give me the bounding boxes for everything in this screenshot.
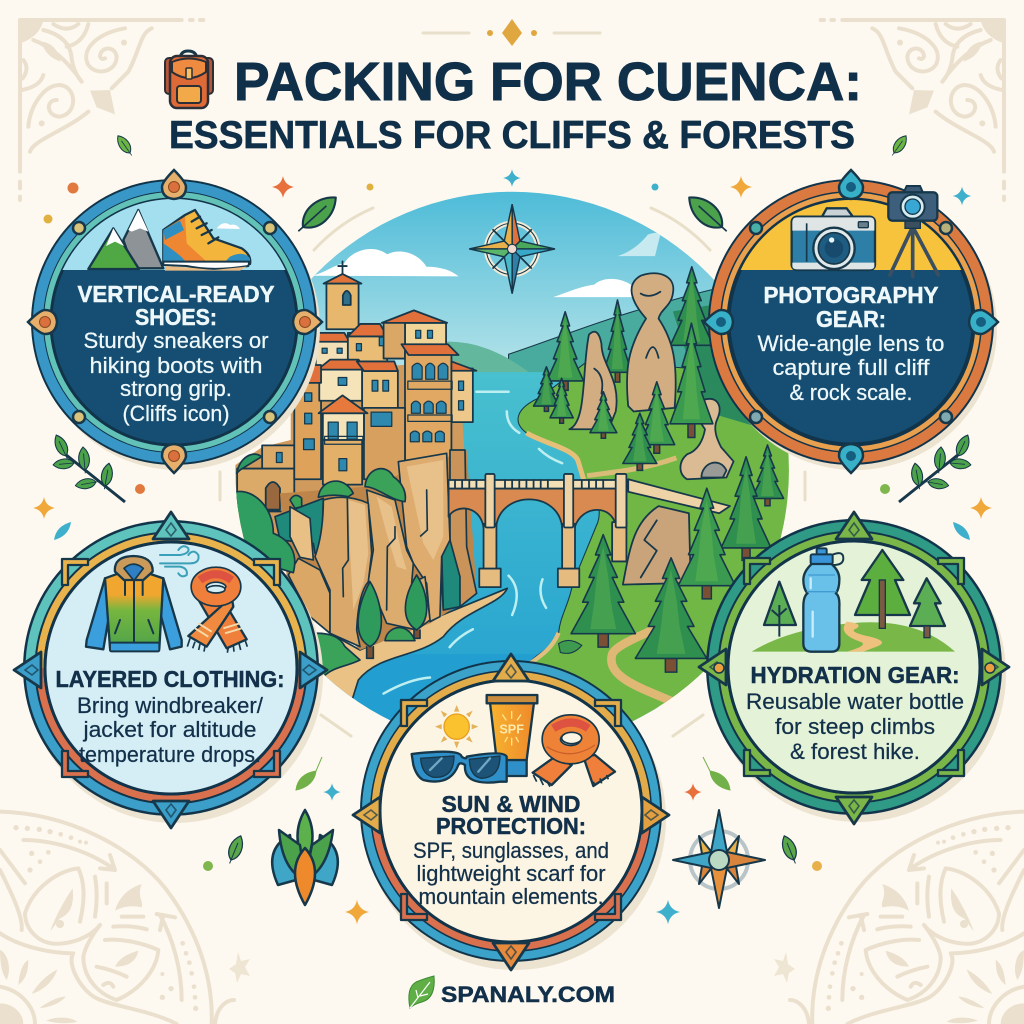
icon: compass star	[673, 810, 765, 908]
front pine trees	[550, 323, 784, 672]
badge text: Bring windbreaker/	[77, 693, 264, 718]
town backing wall	[230, 361, 467, 547]
clouds	[312, 249, 634, 297]
scattered leaves, stars and dots	[33, 133, 992, 924]
badge text: SHOES:	[135, 304, 217, 330]
badge text: Sturdy sneakers or	[84, 328, 268, 353]
badge text: capture full cliff	[772, 355, 930, 380]
badge text: PROTECTION:	[436, 813, 586, 839]
rock formations	[569, 273, 734, 585]
back pine trees	[534, 267, 713, 411]
sky	[311, 192, 714, 366]
icon scene: mountains and boot	[62, 199, 286, 271]
central scene: Cuenca cliffs, river and forest	[235, 192, 789, 722]
badge text: LAYERED CLOTHING:	[56, 666, 284, 692]
badge: photography gear	[704, 170, 998, 473]
footer brand: SPANALY.COM	[441, 982, 615, 1007]
badge text: jacket for altitude	[82, 717, 256, 742]
frame ornaments	[14, 512, 327, 828]
river	[408, 372, 658, 722]
badge text: SPF, sunglasses, and	[413, 838, 609, 863]
top ornament diamond	[423, 19, 600, 46]
badge: vertical-ready shoes	[28, 170, 322, 473]
yellow header band	[740, 200, 962, 270]
frame ornaments	[28, 170, 322, 473]
badge text: lightweight scarf for	[416, 861, 606, 886]
frame ornaments	[353, 654, 669, 970]
badge text: for steep climbs	[775, 714, 935, 739]
badge text	[78, 281, 274, 426]
badge text: (Cliffs icon)	[122, 401, 230, 426]
footer brand	[409, 976, 615, 1008]
frame ornaments	[704, 170, 998, 473]
icon: backpack	[165, 51, 213, 108]
badge: hydration gear	[699, 512, 1009, 824]
icon: jacket, wind and scarf	[86, 546, 247, 653]
icon: cameras and tripod	[792, 186, 938, 277]
leaf branch left	[51, 433, 125, 502]
badge: sun and wind protection	[353, 654, 669, 970]
badge text	[746, 662, 964, 764]
badge text	[758, 282, 944, 405]
building windows	[276, 330, 464, 471]
badge text: & forest hike.	[790, 739, 920, 764]
icon: sun, sunscreen, sunglasses, scarf	[412, 695, 615, 787]
badge text: SUN & WIND	[442, 791, 580, 817]
title	[169, 52, 862, 157]
compass rose in sky	[469, 204, 555, 294]
hills	[508, 289, 712, 372]
frame ornaments	[699, 512, 1009, 824]
badge text: mountain elements.	[418, 884, 604, 909]
badge: layered clothing	[14, 512, 327, 828]
badge text: VERTICAL-READY	[78, 281, 274, 307]
badge text: PHOTOGRAPHY	[764, 282, 938, 308]
forest land	[518, 362, 789, 722]
stone bridge	[449, 474, 730, 587]
title: PACKING FOR CUENCA:	[234, 52, 862, 112]
badge text	[56, 666, 284, 767]
icon: water bottle and trees	[752, 548, 955, 652]
arcs around central scene	[220, 208, 805, 736]
cliffs, bank and vegetation	[230, 450, 507, 707]
badge text: Wide-angle lens to	[758, 331, 944, 356]
badge text: GEAR:	[816, 306, 886, 332]
icon: footer leaf	[409, 976, 434, 1008]
badge text: & rock scale.	[790, 380, 912, 405]
badge text: hiking boots with	[90, 353, 262, 378]
icon: lotus leaf emblem	[272, 810, 338, 905]
subtitle: ESSENTIALS FOR CLIFFS & FORESTS	[169, 114, 855, 157]
badge text: HYDRATION GEAR:	[750, 662, 960, 688]
badge text: strong grip.	[120, 376, 232, 401]
leaf branch right	[899, 433, 973, 502]
town buildings	[237, 261, 476, 511]
SPF label: SPF	[499, 722, 524, 736]
badge text: Reusable water bottle	[746, 689, 964, 714]
badge text	[413, 791, 609, 909]
badge text: temperature drops.	[79, 742, 261, 767]
water ripples	[384, 392, 562, 694]
